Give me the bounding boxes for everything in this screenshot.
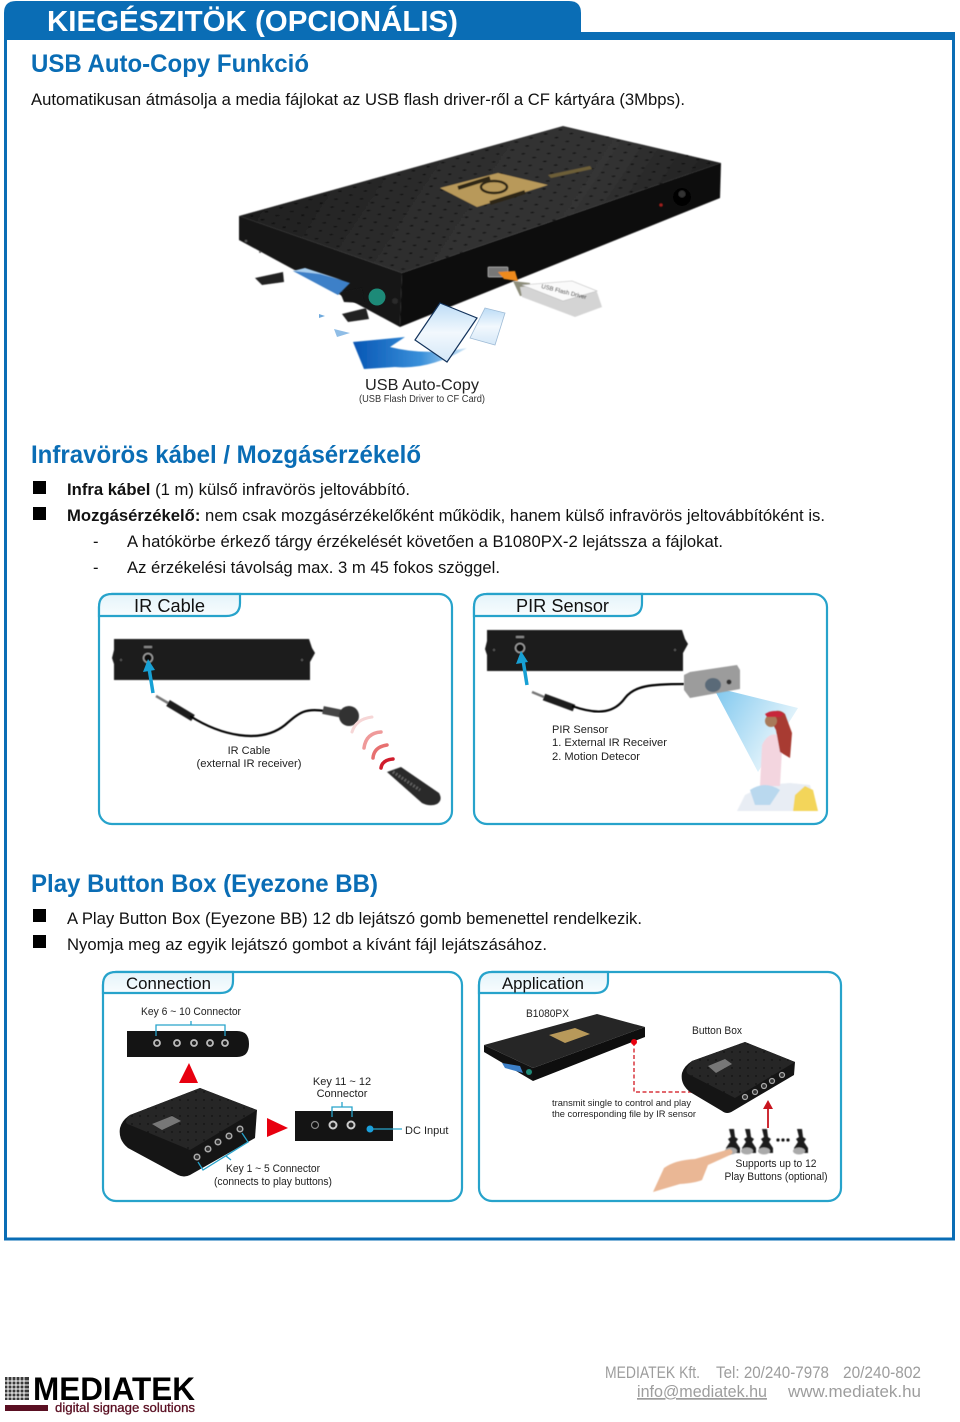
Button Box label: Button Box <box>692 1025 742 1037</box>
hand <box>653 1149 732 1192</box>
bullet list: play button box <box>33 909 642 954</box>
text: USB description: Automatikusan átmásolja a media fájlokat az USB flash driver-ről a CF kártyára (3Mbps). <box>31 91 685 109</box>
Key 11-12 label <box>313 1076 371 1100</box>
logo tagline: digital signage solutions <box>55 1400 195 1415</box>
Key 1-5 label: Key 1 ~ 5 Connector <box>226 1163 320 1175</box>
tab label: IR Cable <box>134 596 205 616</box>
bullet list: infrared: Az érzékelési távolság max. 3 m 45 fokos szöggel. <box>127 559 500 577</box>
B1080PX device <box>484 1014 645 1081</box>
device rear <box>485 630 688 671</box>
heading: Play Button Box: Play Button Box (Eyezone BB) <box>31 870 378 898</box>
footer contact: info@mediatek.hu <box>637 1382 767 1401</box>
brackets <box>255 272 369 322</box>
remote control <box>387 767 441 805</box>
tab label: PIR Sensor <box>516 596 609 616</box>
footer contact: Tel: 20/240-7978 <box>716 1363 829 1382</box>
IR link <box>631 1039 703 1095</box>
bullet list: infrared: Mozgásérzékelő: nem csak mozgásérzékelőként működik, hanem külső infravörös jeltovábbítóként is. <box>67 507 825 525</box>
Key 11-12 label: Connector <box>317 1088 368 1100</box>
play buttons caption: Supports up to 12 <box>736 1158 816 1170</box>
DC Input label: DC Input <box>405 1125 448 1137</box>
arrow fragments <box>319 314 350 337</box>
woman with shopping bags <box>737 711 818 811</box>
panel tab <box>479 972 608 993</box>
PIR sensor box <box>684 665 740 698</box>
bullet list: infrared <box>33 481 825 577</box>
caption <box>196 745 302 770</box>
device rear <box>112 639 315 680</box>
right triangle <box>267 1118 288 1137</box>
caption: USB Auto-Copy <box>365 377 479 394</box>
IR link caption: the corresponding file by IR sensor <box>552 1109 696 1120</box>
play buttons caption <box>724 1158 828 1183</box>
footer contact: www.mediatek.hu <box>787 1382 921 1401</box>
up triangle <box>179 1063 198 1083</box>
title: KIEGÉSZITÖK (OPCIONÁLIS) <box>47 4 458 38</box>
caption: (external IR receiver) <box>196 758 302 770</box>
arrow <box>143 659 155 693</box>
footer contact: MEDIATEK Kft. <box>605 1363 700 1382</box>
footer logo: MEDIATEK <box>5 1371 195 1415</box>
arrow <box>516 651 528 685</box>
panel: PIR Sensor <box>474 594 827 824</box>
caption: 1. External IR Receiver <box>552 737 667 749</box>
light beam <box>713 687 798 772</box>
bullet list: infrared: Infra kábel (1 m) külső infravörös jeltovábbító. <box>67 481 410 499</box>
heading: USB Auto-Copy: USB Auto-Copy Funkció <box>31 50 309 78</box>
button box <box>682 1042 795 1113</box>
panel: IR Cable <box>99 594 452 824</box>
caption <box>552 724 667 763</box>
Key 1-5 label: (connects to play buttons) <box>214 1176 332 1188</box>
footer contact <box>605 1363 921 1401</box>
B1080PX label: B1080PX <box>526 1008 570 1020</box>
logo wordmark: MEDIATEK <box>33 1371 195 1407</box>
Key 11-12 label: Key 11 ~ 12 <box>313 1076 371 1088</box>
PIR cable <box>532 684 684 712</box>
bullet list: infrared: - <box>93 533 98 551</box>
Key 1-5 label <box>214 1163 332 1188</box>
IR link caption: transmit single to control and play <box>552 1098 691 1109</box>
caption: PIR Sensor <box>552 724 609 736</box>
panel: Application <box>479 972 841 1201</box>
panel tab <box>474 594 642 616</box>
Key 6-10 connector bar <box>127 1021 249 1057</box>
illustration: media player with USB auto-copy <box>239 126 721 405</box>
USB flash drive: USB Flash Driver <box>541 284 587 301</box>
CF card <box>293 268 364 303</box>
Key 6-10 label: Key 6 ~ 10 Connector <box>141 1006 241 1018</box>
footer contact: 20/240-802 <box>843 1363 921 1382</box>
logo mosaic <box>5 1377 48 1411</box>
caption: IR Cable <box>228 745 270 757</box>
play buttons caption: Play Buttons (optional) <box>724 1171 828 1183</box>
copy arrow <box>353 337 467 369</box>
device body <box>239 126 721 327</box>
Key 11-12 connector bar <box>295 1102 402 1141</box>
button box <box>120 1088 257 1176</box>
tab label: Connection <box>126 974 211 993</box>
USB flash drive <box>488 267 602 317</box>
IR cable <box>156 696 359 736</box>
reset button <box>368 288 386 306</box>
bullet list: infrared: A hatókörbe érkező tárgy érzékelését követően a B1080PX-2 lejátssza a fájlokat. <box>127 533 723 551</box>
bullet list: infrared: - <box>93 559 98 577</box>
heading: Infrared: Infravörös kábel / Mozgásérzékelő <box>31 441 421 469</box>
sub caption: (USB Flash Driver to CF Card) <box>359 394 485 405</box>
panel tab <box>99 594 240 616</box>
copied file cards <box>415 303 505 362</box>
panel tab <box>103 972 233 993</box>
panel: Connection <box>103 972 462 1201</box>
IR waves <box>352 717 393 768</box>
play buttons <box>725 1129 808 1154</box>
caption: 2. Motion Detecor <box>552 751 640 763</box>
bullet list: play button box: Nyomja meg az egyik lejátszó gombot a kívánt fájl lejátszásához. <box>67 936 547 954</box>
bullet list: play button box: A Play Button Box (Eyezone BB) 12 db lejátszó gomb bemenettel rendelkezik. <box>67 910 642 928</box>
tab label: Application <box>502 974 584 993</box>
red arrow <box>763 1100 773 1128</box>
IR link caption <box>552 1098 696 1120</box>
